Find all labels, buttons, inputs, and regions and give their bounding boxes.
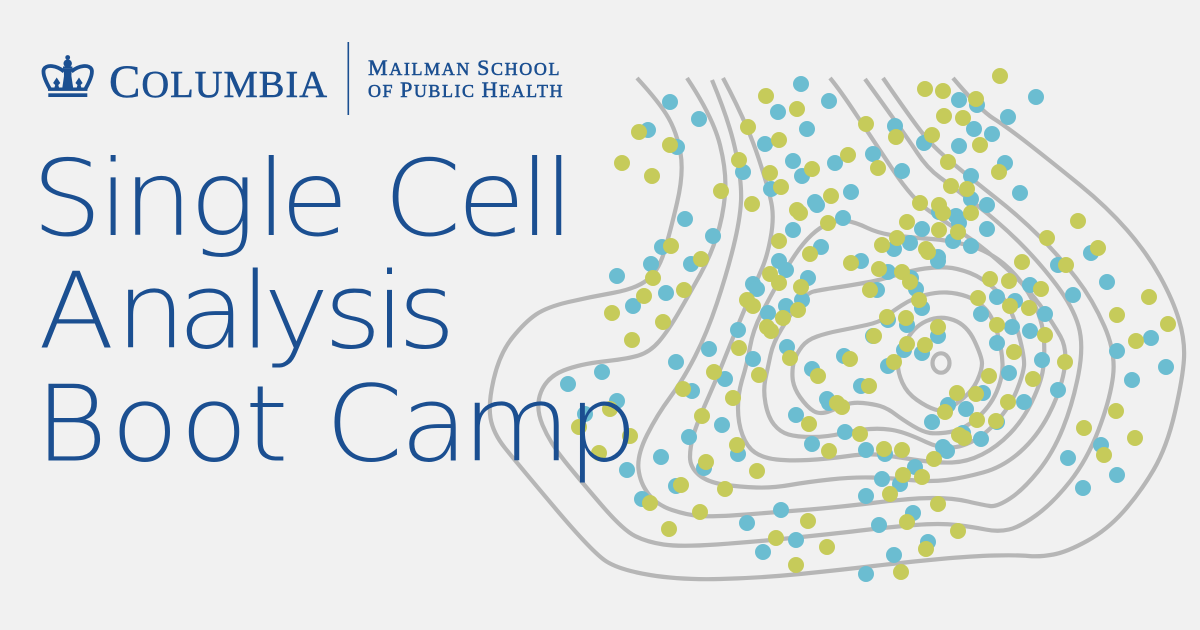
icon: Columbia crown: [43, 55, 92, 97]
contour line 1 (outermost): [490, 78, 1184, 579]
title line 3: Boot Camp: [35, 363, 638, 486]
wordmark: Columbia: COLUMBIA: [109, 56, 327, 108]
title: Single Cell Analysis Boot Camp: [32, 138, 638, 486]
blue cell dots: [560, 76, 1174, 582]
title line 1: Single Cell: [32, 138, 574, 260]
contour peak ring: [932, 353, 950, 373]
contour line 4: [690, 78, 1065, 488]
contour line 8: [898, 318, 982, 411]
contour line 5: [738, 221, 1044, 463]
contour line 3: [638, 79, 1081, 516]
contour line 7: [792, 292, 1003, 433]
school name: [368, 55, 562, 102]
school name: MAILMAN SCHOOL: [368, 55, 560, 80]
contour line 2: [538, 78, 1114, 546]
school name: OF PUBLIC HEALTH: [368, 77, 562, 102]
title line 2: Analysis: [38, 250, 456, 373]
olive cell dots: [571, 68, 1176, 580]
contour line 6: [764, 267, 1024, 448]
logo: Columbia Mailman School of Public Health: [43, 42, 563, 115]
logo divider: [348, 42, 349, 115]
contour map: [490, 78, 1184, 579]
